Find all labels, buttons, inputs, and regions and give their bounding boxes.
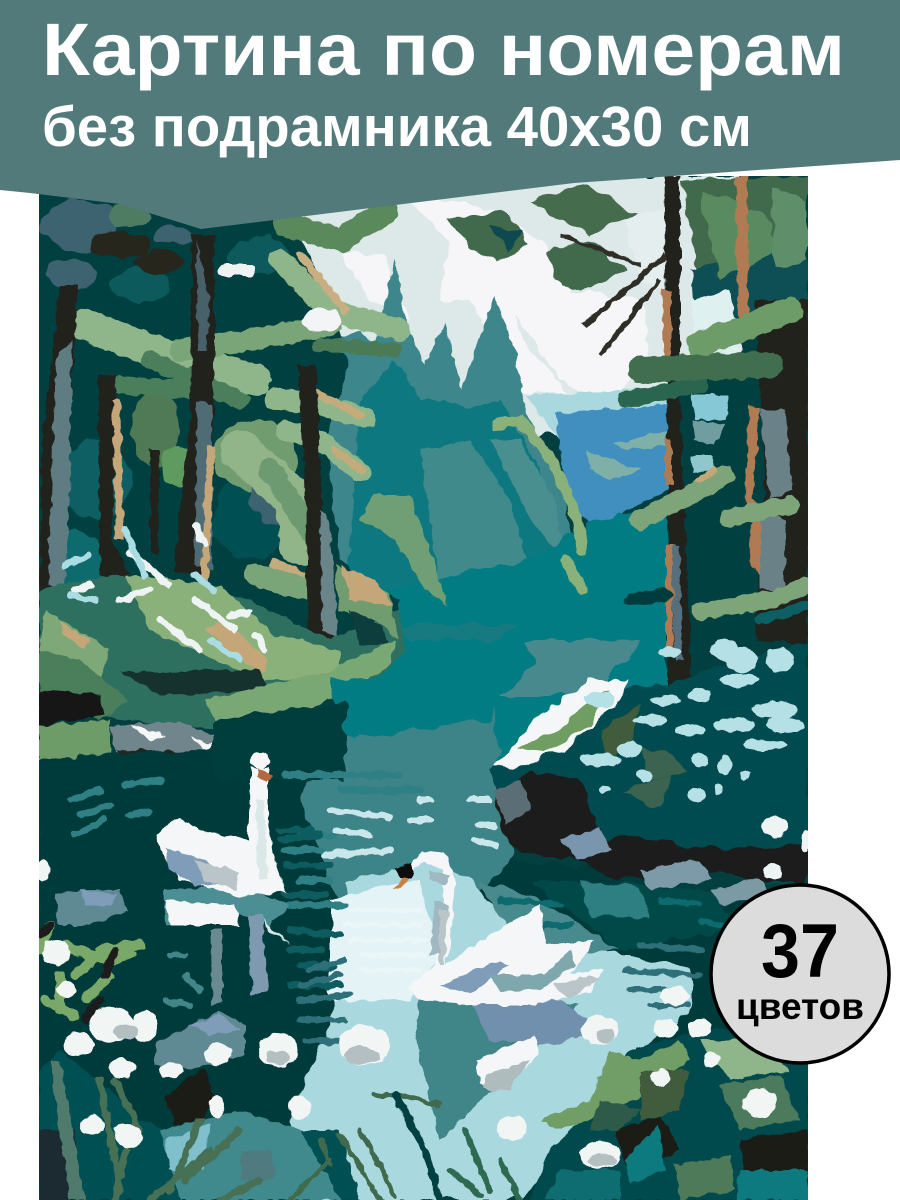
left shore bushes <box>39 565 405 772</box>
left forest mass <box>39 198 400 630</box>
title: line 2: без подрамника 40x30 см <box>42 95 752 159</box>
green ridge beside the lake <box>497 420 583 590</box>
plant stems and reeds <box>39 925 520 1200</box>
painting base <box>39 176 808 1200</box>
foreground right plants <box>530 1030 808 1200</box>
light sky gaps in right forest <box>690 290 740 472</box>
white flowers on right bank <box>580 639 811 880</box>
header banner <box>0 0 900 229</box>
painting: forest lake with swans <box>34 176 811 1200</box>
lake water <box>39 674 730 1200</box>
left tree trunks <box>40 235 338 640</box>
white flowers across the foreground <box>34 859 777 1169</box>
title: line 1: Картина по номерам <box>42 8 845 91</box>
badge: colour count <box>711 885 889 1063</box>
white flowers on left bushes <box>65 525 265 660</box>
far swan <box>158 752 290 1005</box>
near swan <box>392 850 604 1140</box>
left pine branches <box>85 212 400 590</box>
right forest mass <box>446 176 808 486</box>
sky <box>300 176 740 436</box>
badge: colour count: цветов <box>736 986 864 1027</box>
badge: colour count: 37 <box>761 909 839 994</box>
green mid-distance bush <box>360 495 448 605</box>
right tree trunks <box>560 176 808 690</box>
foreground left plants and rocks <box>39 890 360 1200</box>
water ripples <box>70 775 720 1042</box>
right shore bank <box>490 640 808 890</box>
right pine branches <box>625 310 808 620</box>
calm mid-lake water <box>383 512 668 760</box>
rocks on the right bank <box>495 780 770 905</box>
distant mountains and fir trees <box>328 259 670 591</box>
